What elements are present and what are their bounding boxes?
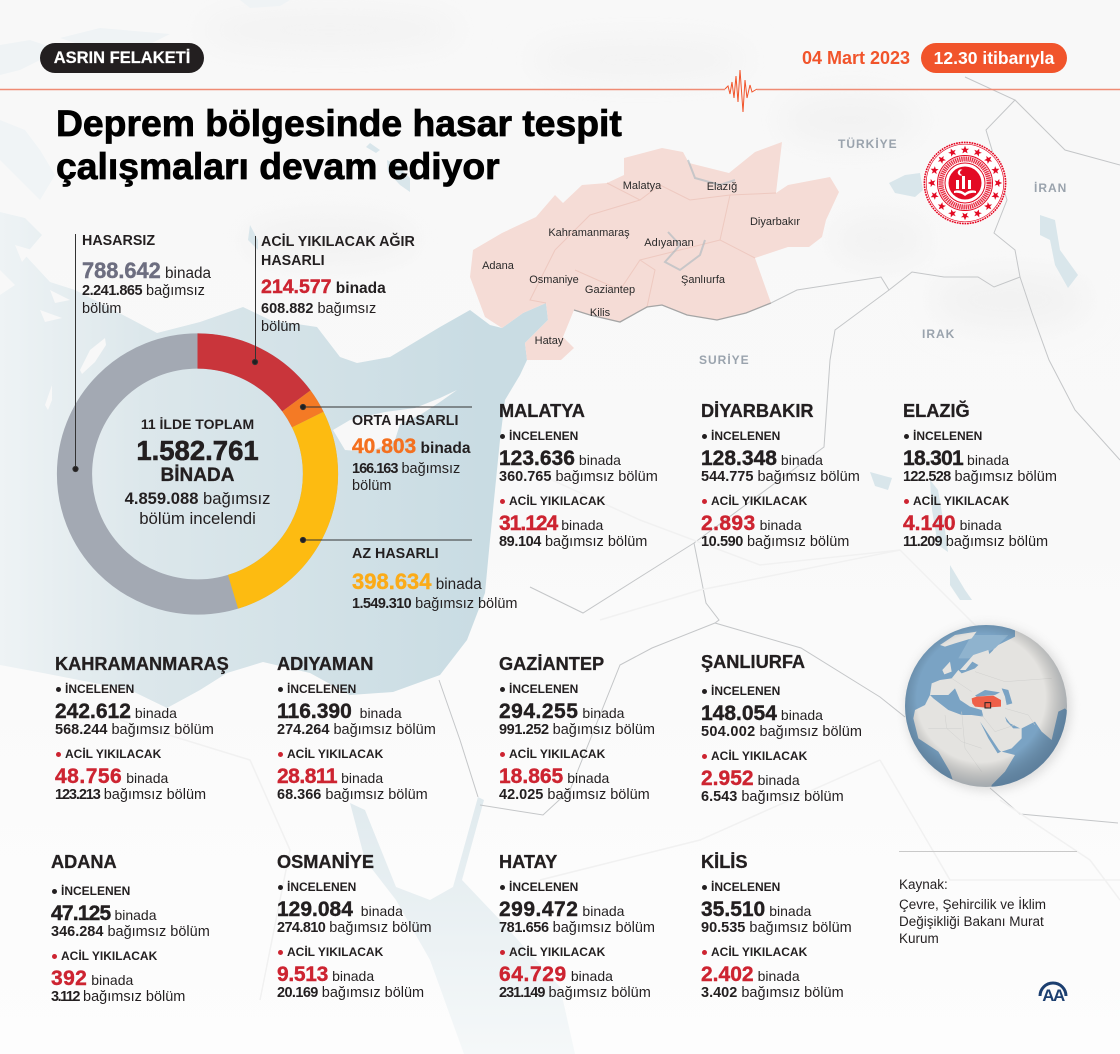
- inspected: [903, 429, 1057, 485]
- time badge: 12.30 itibarıyla: [934, 48, 1054, 68]
- panel: Malatya: [499, 401, 658, 550]
- panel: Kahramanmaraş: [55, 654, 229, 803]
- pale upper left waters: [0, 0, 290, 75]
- panel: Şanlıurfa: [701, 652, 862, 805]
- province labels on map: Diyarbakır: [750, 216, 800, 228]
- country labels: TÜRKİYE: [838, 137, 898, 151]
- donut centre totals: bölüm incelendi: [139, 509, 256, 528]
- country labels: İRAN: [1034, 181, 1067, 195]
- donut centre totals: 11 İLDE TOPLAM: [141, 416, 254, 432]
- inspected: [499, 682, 655, 738]
- to be demolished: 9.513 binada: [277, 963, 374, 986]
- province labels on map: Malatya: [623, 180, 661, 192]
- title: [56, 102, 622, 187]
- to be demolished: 2.402 binada: [701, 963, 800, 986]
- to be demolished: 48.756 binada: [55, 765, 168, 788]
- inspected: İNCELENEN: [287, 880, 356, 894]
- callout: ACİL YIKILACAK AĞIR HASARLI: ACİL YIKILACAK AĞIR: [261, 234, 415, 250]
- source divider and text: Değişikliği Bakanı Murat: [899, 914, 1044, 929]
- header tag: ASRIN FELAKETİ: [40, 43, 204, 73]
- to be demolished: 3.112 bağımsız bölüm: [51, 989, 185, 1005]
- to be demolished: [55, 747, 206, 803]
- province labels on map: Osmaniye: [529, 274, 579, 286]
- callout: ACİL YIKILACAK AĞIR HASARLI: 608.882 bağımsız: [261, 301, 376, 317]
- borders: [439, 77, 1120, 823]
- to be demolished: ACİL YIKILACAK: [65, 747, 161, 761]
- inspected: 122.528 bağımsız bölüm: [903, 469, 1057, 485]
- inspected: 299.472 binada: [499, 898, 624, 921]
- leader lines and dots: [72, 234, 472, 544]
- panel: Adıyaman: [277, 654, 436, 803]
- heading: ŞANLIURFA: [701, 652, 805, 672]
- callout: AZ HASARLI: 1.549.310 bağımsız bölüm: [352, 596, 518, 612]
- inspected: 90.535 bağımsız bölüm: [701, 920, 852, 936]
- source divider and text: Çevre, Şehircilik ve İklim: [899, 897, 1046, 912]
- inspected: 544.775 bağımsız bölüm: [701, 469, 860, 485]
- heading: HATAY: [499, 852, 557, 872]
- heading: KAHRAMANMARAŞ: [55, 654, 229, 674]
- province labels on map: Şanlıurfa: [681, 274, 725, 286]
- inspected: İNCELENEN: [509, 429, 578, 443]
- panel: Adana: [51, 852, 210, 1005]
- to be demolished: [701, 494, 849, 550]
- panel: Hatay: [499, 852, 655, 1001]
- to be demolished: [701, 942, 906, 1004]
- icon: AA logo: [1038, 977, 1068, 1003]
- inspected: 18.301 binada: [903, 447, 1009, 470]
- header rule with seismograph icon: [0, 70, 1120, 112]
- donut centre totals: 4.859.088 bağımsız: [125, 489, 270, 508]
- to be demolished: 231.149 bağımsız bölüm: [499, 985, 651, 1001]
- to be demolished: ACİL YIKILACAK: [61, 949, 157, 963]
- callout: ORTA HASARLI: ORTA HASARLI: [352, 413, 458, 429]
- callout: ACİL YIKILACAK AĞIR HASARLI: HASARLI: [261, 253, 325, 269]
- inspected: 294.255 binada: [499, 700, 624, 723]
- to be demolished: 4.140 binada: [903, 512, 1002, 535]
- panel: Gaziantep: [499, 654, 655, 803]
- inspected: 123.636 binada: [499, 447, 621, 470]
- icon: locator globe: [902, 622, 1074, 794]
- callout: HASARSIZ: HASARSIZ: [82, 233, 155, 249]
- callout: AZ HASARLI: 398.634 binada: [352, 569, 482, 594]
- source divider and text: Kaynak:: [899, 877, 948, 892]
- to be demolished: ACİL YIKILACAK: [287, 945, 383, 959]
- callout: ACİL YIKILACAK AĞIR HASARLI: 214.577 binada: [261, 276, 386, 298]
- panel: Diyarbakır: [701, 401, 860, 550]
- inspected: 991.252 bağımsız bölüm: [499, 722, 655, 738]
- inspected: [499, 429, 658, 485]
- callout: HASARSIZ: bölüm: [82, 301, 122, 317]
- callout: ACİL YIKILACAK AĞIR HASARLI: [261, 232, 415, 335]
- donut centre totals: [124, 416, 270, 528]
- heading: ADIYAMAN: [277, 654, 373, 674]
- to be demolished: 6.543 bağımsız bölüm: [701, 789, 844, 805]
- heading: ADANA: [51, 852, 117, 872]
- to be demolished: ACİL YIKILACAK: [711, 749, 807, 763]
- province labels on map: [482, 180, 800, 347]
- donut centre totals: BİNADA: [161, 465, 234, 486]
- panel: Kilis: [701, 852, 906, 1002]
- callout: ORTA HASARLI: 166.163 bağımsız: [352, 461, 460, 477]
- callout: ORTA HASARLI: [352, 413, 471, 494]
- to be demolished: ACİL YIKILACAK: [509, 747, 605, 761]
- inspected: [701, 429, 860, 485]
- to be demolished: 123.213 bağımsız bölüm: [55, 787, 206, 803]
- inspected: [277, 880, 432, 936]
- to be demolished: 20.169 bağımsız bölüm: [277, 985, 424, 1001]
- inspected: [277, 682, 436, 738]
- inspected: 242.612 binada: [55, 700, 177, 723]
- to be demolished: ACİL YIKILACAK: [711, 945, 807, 959]
- to be demolished: 11.209 bağımsız bölüm: [903, 534, 1048, 550]
- province labels on map: Adıyaman: [644, 237, 694, 249]
- to be demolished: [499, 747, 650, 803]
- inspected: İNCELENEN: [287, 682, 356, 696]
- to be demolished: 3.402 bağımsız bölüm: [701, 985, 844, 1001]
- heading: ELAZIĞ: [903, 401, 970, 421]
- time badge: [921, 43, 1067, 73]
- mediterranean sea: [0, 212, 548, 708]
- inspected: [499, 877, 704, 939]
- inspected: İNCELENEN: [711, 880, 780, 894]
- source divider and text: Kurum: [899, 931, 939, 946]
- to be demolished: 18.865 binada: [499, 765, 609, 788]
- inspected: 274.810 bağımsız bölüm: [277, 920, 432, 936]
- chart: damage donut: [56, 333, 338, 615]
- inspected: 148.054 binada: [701, 702, 823, 725]
- inspected: [701, 877, 906, 939]
- to be demolished: [277, 945, 424, 1001]
- lakes: [248, 143, 1078, 600]
- province labels on map: Kahramanmaraş: [548, 227, 630, 239]
- province labels on map: Kilis: [590, 307, 610, 319]
- to be demolished: 10.590 bağımsız bölüm: [701, 534, 849, 550]
- to be demolished: ACİL YIKILACAK: [913, 494, 1009, 508]
- callout: HASARSIZ: [82, 233, 211, 317]
- heading: DİYARBAKIR: [701, 401, 814, 421]
- inspected: 274.264 bağımsız bölüm: [277, 722, 436, 738]
- to be demolished: 68.366 bağımsız bölüm: [277, 787, 428, 803]
- inspected: İNCELENEN: [61, 884, 130, 898]
- to be demolished: 392 binada: [51, 967, 133, 990]
- panel: Osmaniye: [277, 852, 432, 1001]
- callout: ORTA HASARLI: 40.803 binada: [352, 435, 470, 458]
- title: Deprem bölgesinde hasar tespit: [56, 102, 622, 144]
- inspected: 346.284 bağımsız bölüm: [51, 924, 210, 940]
- heading: KİLİS: [701, 852, 747, 872]
- inspected: İNCELENEN: [711, 684, 780, 698]
- to be demolished: 31.124 binada: [499, 512, 603, 535]
- inspected: [701, 684, 862, 740]
- callout: ORTA HASARLI: bölüm: [352, 478, 392, 494]
- heading: OSMANİYE: [277, 852, 374, 872]
- inspected: 47.125 binada: [51, 902, 156, 925]
- date: 04 Mart 2023: [802, 48, 910, 68]
- to be demolished: 2.893 binada: [701, 512, 802, 535]
- inspected: 504.002 bağımsız bölüm: [701, 724, 862, 740]
- inspected: [51, 884, 210, 940]
- inspected: 781.656 bağımsız bölüm: [499, 920, 655, 936]
- inspected: İNCELENEN: [913, 429, 982, 443]
- callout: ACİL YIKILACAK AĞIR HASARLI: bölüm: [261, 319, 300, 335]
- heading: GAZİANTEP: [499, 654, 604, 674]
- province labels on map: Gaziantep: [585, 284, 635, 296]
- to be demolished: 2.952 binada: [701, 767, 800, 790]
- to be demolished: 28.811 binada: [277, 765, 383, 788]
- to be demolished: 64.729 binada: [499, 963, 613, 986]
- inspected: 129.084 binada: [277, 898, 403, 921]
- callout: AZ HASARLI: [352, 546, 518, 612]
- to be demolished: [277, 747, 428, 803]
- province labels on map: Elazığ: [707, 181, 737, 193]
- to be demolished: ACİL YIKILACAK: [509, 494, 605, 508]
- inspected: İNCELENEN: [711, 429, 780, 443]
- donut centre totals: 1.582.761: [136, 435, 259, 466]
- panel: Elazığ: [903, 400, 1057, 550]
- to be demolished: ACİL YIKILACAK: [711, 494, 807, 508]
- title: çalışmaları devam ediyor: [56, 145, 500, 187]
- inspected: İNCELENEN: [65, 682, 134, 696]
- to be demolished: [903, 494, 1048, 550]
- heading: MALATYA: [499, 401, 585, 421]
- inspected: 568.244 bağımsız bölüm: [55, 722, 214, 738]
- country labels: SURİYE: [699, 353, 750, 367]
- to be demolished: ACİL YIKILACAK: [287, 747, 383, 761]
- to be demolished: ACİL YIKILACAK: [509, 945, 605, 959]
- header tag: ASRIN FELAKETİ: ASRIN FELAKETİ: [54, 49, 190, 67]
- inspected: İNCELENEN: [509, 682, 578, 696]
- country labels: [699, 137, 1067, 367]
- to be demolished: [701, 749, 844, 805]
- to be demolished: 89.104 bağımsız bölüm: [499, 534, 647, 550]
- red sea: [350, 797, 575, 1054]
- province labels on map: Hatay: [535, 335, 563, 347]
- icon: ministry seal: [924, 142, 1006, 224]
- to be demolished: 42.025 bağımsız bölüm: [499, 787, 650, 803]
- to be demolished: [499, 494, 647, 550]
- islands: [0, 245, 457, 452]
- inspected: İNCELENEN: [509, 880, 578, 894]
- source divider and text: [899, 851, 1077, 951]
- inspected: [55, 682, 214, 738]
- to be demolished: [499, 942, 704, 1004]
- province labels on map: Adana: [482, 260, 514, 272]
- inspected: 35.510 binada: [701, 898, 811, 921]
- inspected: 128.348 binada: [701, 447, 823, 470]
- callout: HASARSIZ: 788.642 binada: [82, 258, 211, 283]
- callout: HASARSIZ: 2.241.865 bağımsız: [82, 283, 205, 299]
- callout: AZ HASARLI: AZ HASARLI: [352, 546, 439, 562]
- inspected: 116.390 binada: [277, 700, 402, 723]
- inspected: 360.765 bağımsız bölüm: [499, 469, 658, 485]
- country labels: IRAK: [922, 327, 955, 341]
- to be demolished: [51, 949, 185, 1005]
